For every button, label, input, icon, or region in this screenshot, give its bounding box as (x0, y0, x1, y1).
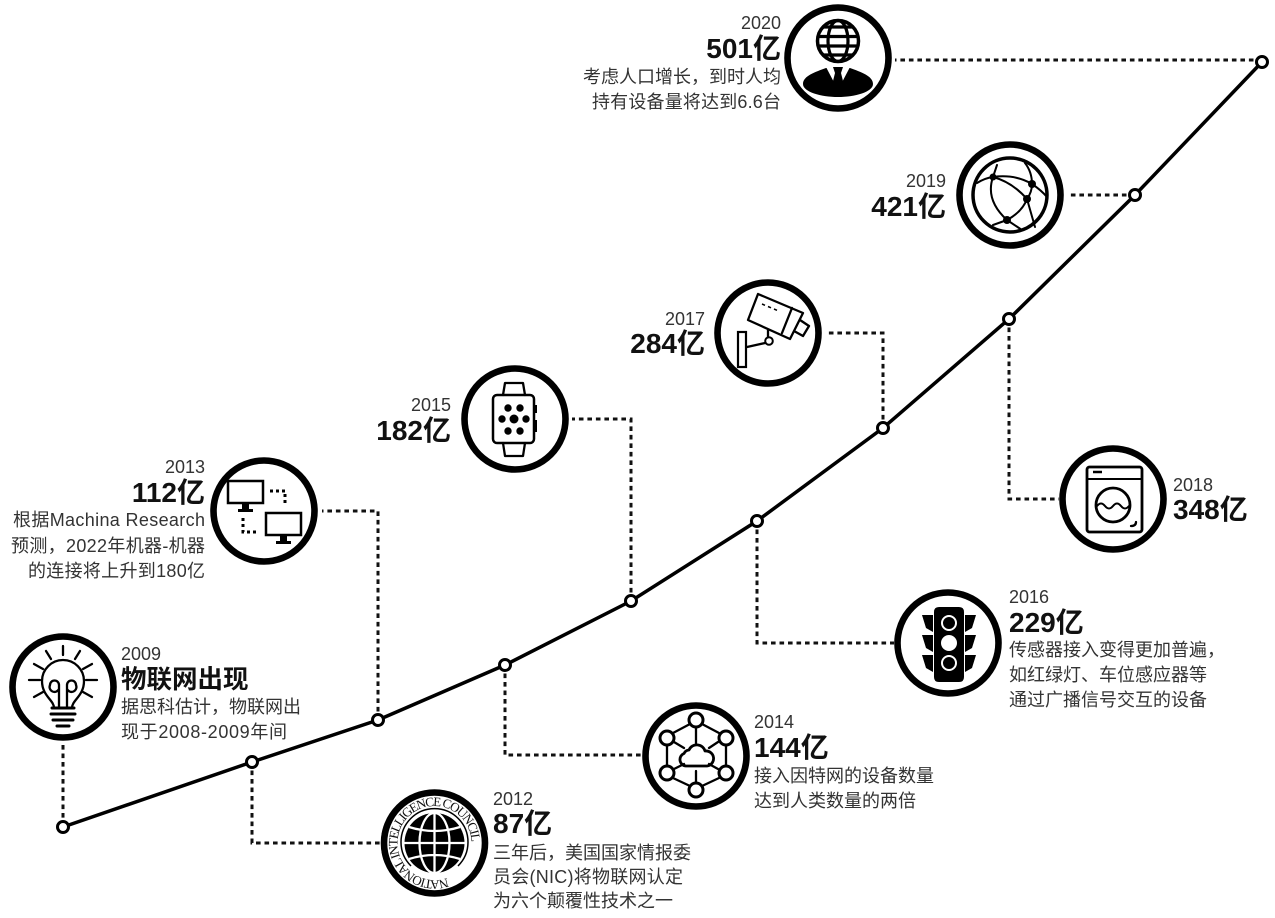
entry: 2013 (11, 457, 314, 581)
value: 87亿 (493, 808, 552, 839)
year: 2013 (165, 457, 205, 477)
year: 2009 (121, 644, 161, 664)
entry: 2015 (376, 368, 566, 470)
icon: businessman with globe head (788, 8, 888, 108)
value: 229亿 (1009, 607, 1084, 638)
value: 501亿 (706, 33, 781, 64)
description: 持有设备量将达到6.6台 (592, 92, 781, 112)
entry: 2019 (871, 144, 1060, 246)
description: 为六个颠覆性技术之一 (493, 891, 673, 911)
icon: cloud network (646, 706, 746, 806)
value: 421亿 (871, 191, 946, 222)
value: 144亿 (754, 732, 829, 763)
description (754, 766, 934, 811)
description: 预测，2022年机器-机器 (11, 536, 205, 556)
value: 284亿 (630, 328, 705, 359)
year: 2016 (1009, 587, 1049, 607)
description: 员会(NIC)将物联网认定 (493, 867, 683, 887)
description: 的连接将上升到180亿 (28, 561, 205, 581)
entry: 2018 (1062, 448, 1248, 550)
description: 现于2008-2009年间 (121, 722, 287, 742)
entry: 2012 (380, 789, 691, 911)
description: 传感器接入变得更加普遍， (1009, 640, 1225, 660)
entry: 2020 (583, 8, 888, 112)
description: 接入因特网的设备数量 (754, 766, 934, 786)
icon: National Intelligence Council seal: NATIONAL INTELLIGENCE COUNCIL (388, 797, 480, 889)
heading: 物联网出现 (121, 666, 249, 694)
description (493, 843, 691, 911)
description: 根据Machina Research (13, 510, 205, 530)
description: 考虑人口增长，到时人均 (583, 67, 781, 87)
icon: network globe (960, 144, 1060, 246)
description (583, 67, 781, 112)
description: 如红绿灯、车位感应器等 (1009, 665, 1207, 685)
value: 348亿 (1173, 494, 1248, 525)
icon: light bulb (12, 636, 114, 738)
year: 2014 (754, 712, 794, 732)
year: 2019 (906, 171, 946, 191)
description: 三年后，美国国家情报委 (493, 843, 691, 863)
entry: 2016 (898, 587, 1225, 710)
icon: washing machine (1062, 448, 1164, 550)
year: 2020 (741, 13, 781, 33)
value: 112亿 (132, 477, 205, 508)
year: 2018 (1173, 475, 1213, 495)
entry: 2017 (630, 282, 818, 384)
description: 通过广播信号交互的设备 (1009, 690, 1207, 710)
icon: connected monitors (214, 460, 314, 562)
entry: 2014 (646, 706, 934, 811)
year: 2015 (411, 395, 451, 415)
year: 2017 (665, 309, 705, 329)
description (11, 510, 205, 581)
entry: 2009 (12, 636, 301, 742)
growth line (63, 62, 1262, 827)
icon: traffic light (898, 592, 998, 694)
description: 达到人类数量的两倍 (754, 791, 916, 811)
year: 2012 (493, 789, 533, 809)
description (1009, 640, 1225, 710)
icon: security camera (718, 282, 818, 384)
description (121, 697, 301, 742)
icon: smart watch (464, 368, 566, 470)
value: 182亿 (376, 415, 451, 446)
description: 据思科估计，物联网出 (121, 697, 301, 717)
